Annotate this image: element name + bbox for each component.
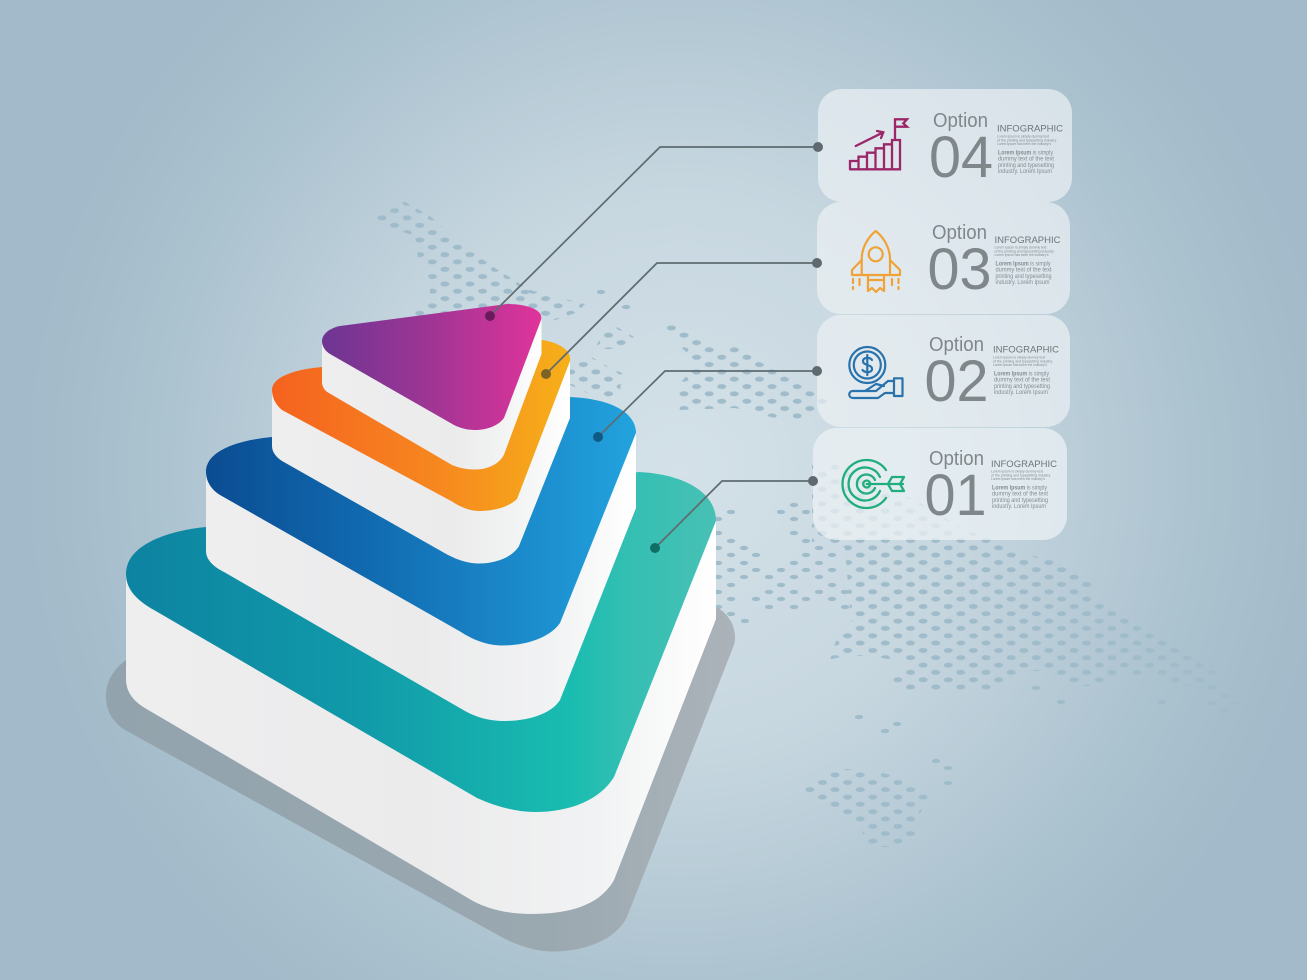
option 03 description: dummy text of the text [996,268,1052,274]
option 03 description: Lorem Ipsum is simply [996,262,1050,268]
option 04 description: printing and typesetting [998,163,1054,169]
option 01 description: of the printing and typesetting industry. [991,473,1051,477]
leader line: option 03 [541,258,822,379]
option 01 label: Option [929,448,984,470]
option 03 description: Lorem Ipsum is simply dummy text [994,246,1047,250]
dotted world map [378,202,1216,847]
option 01 description: Lorem Ipsum is simply [992,486,1047,492]
leader line: option 02 [593,366,822,442]
option 04 label: Option [933,110,988,132]
option 03 label: Option [932,222,987,244]
option 01 description: Lorem Ipsum has been the industry's [991,477,1045,481]
card: option 01 [813,428,1067,540]
option 01 description: INFOGRAPHIC [991,459,1057,470]
option 04 description: Lorem Ipsum is simply [998,150,1053,156]
layer 4: purple tier [322,304,542,470]
stacked pyramid chart [126,304,716,914]
leader line: option 01 [650,476,818,553]
layer 2: blue tier [206,397,636,721]
option 04 description: Lorem Ipsum is simply dummy text [997,134,1049,138]
option 04 number: 04 [929,125,993,190]
pyramid ground shadow [106,608,735,952]
option 02 description: of the printing and typesetting industry. [993,359,1053,363]
card: option 03 [817,202,1070,314]
option 01 description: Lorem Ipsum is simply dummy text [991,470,1043,474]
option 04 description [997,124,1063,175]
option 04 description: Lorem Ipsum has been the industry's [997,142,1051,146]
icon: rocket [852,231,900,292]
option 03 description: industry. Lorem Ipsum [996,280,1050,286]
option 04 description: industry. Lorem Ipsum [998,169,1052,175]
option 03 number: 03 [928,237,992,302]
leader line: option 04 [485,142,823,321]
option 02 description [993,344,1059,396]
option 04 description: INFOGRAPHIC [997,124,1063,134]
layer 1: teal tier [126,472,716,914]
option 02 label: Option [929,334,984,356]
card: option 04 [818,89,1072,202]
option 02 description: INFOGRAPHIC [993,344,1059,356]
option 04 description: dummy text of the text [998,157,1054,163]
option 03 description: of the printing and typesetting industry. [994,249,1055,253]
option 01 description: industry. Lorem Ipsum [992,504,1046,510]
icon: growth chart with flag [850,119,907,169]
option 03 description: printing and typesetting [996,274,1052,280]
option 02 description: industry. Lorem Ipsum [994,390,1048,396]
card: option 02 [817,315,1070,427]
option 03 description: INFOGRAPHIC [994,235,1061,246]
option 01 description: dummy text of the text [992,492,1048,498]
option 02 description: Lorem Ipsum is simply dummy text [993,356,1045,360]
option 02 description: Lorem Ipsum is simply [994,372,1049,378]
option 01 description: printing and typesetting [992,498,1048,504]
layer 3: orange tier [272,340,570,564]
option 01 number: 01 [924,463,986,528]
option 03 description [994,235,1061,286]
option 03 description: Lorem Ipsum has been the industry's [994,253,1049,257]
option 02 description: Lorem Ipsum has been the industry's [993,363,1047,367]
icon: target with arrow [843,460,904,508]
option 01 description [991,459,1057,510]
option 02 number: 02 [924,349,988,414]
option 02 description: dummy text of the text [994,378,1050,384]
option 04 description: of the printing and typesetting industry. [997,138,1057,142]
option 02 description: printing and typesetting [994,384,1050,390]
icon: coin over hand [849,347,902,398]
